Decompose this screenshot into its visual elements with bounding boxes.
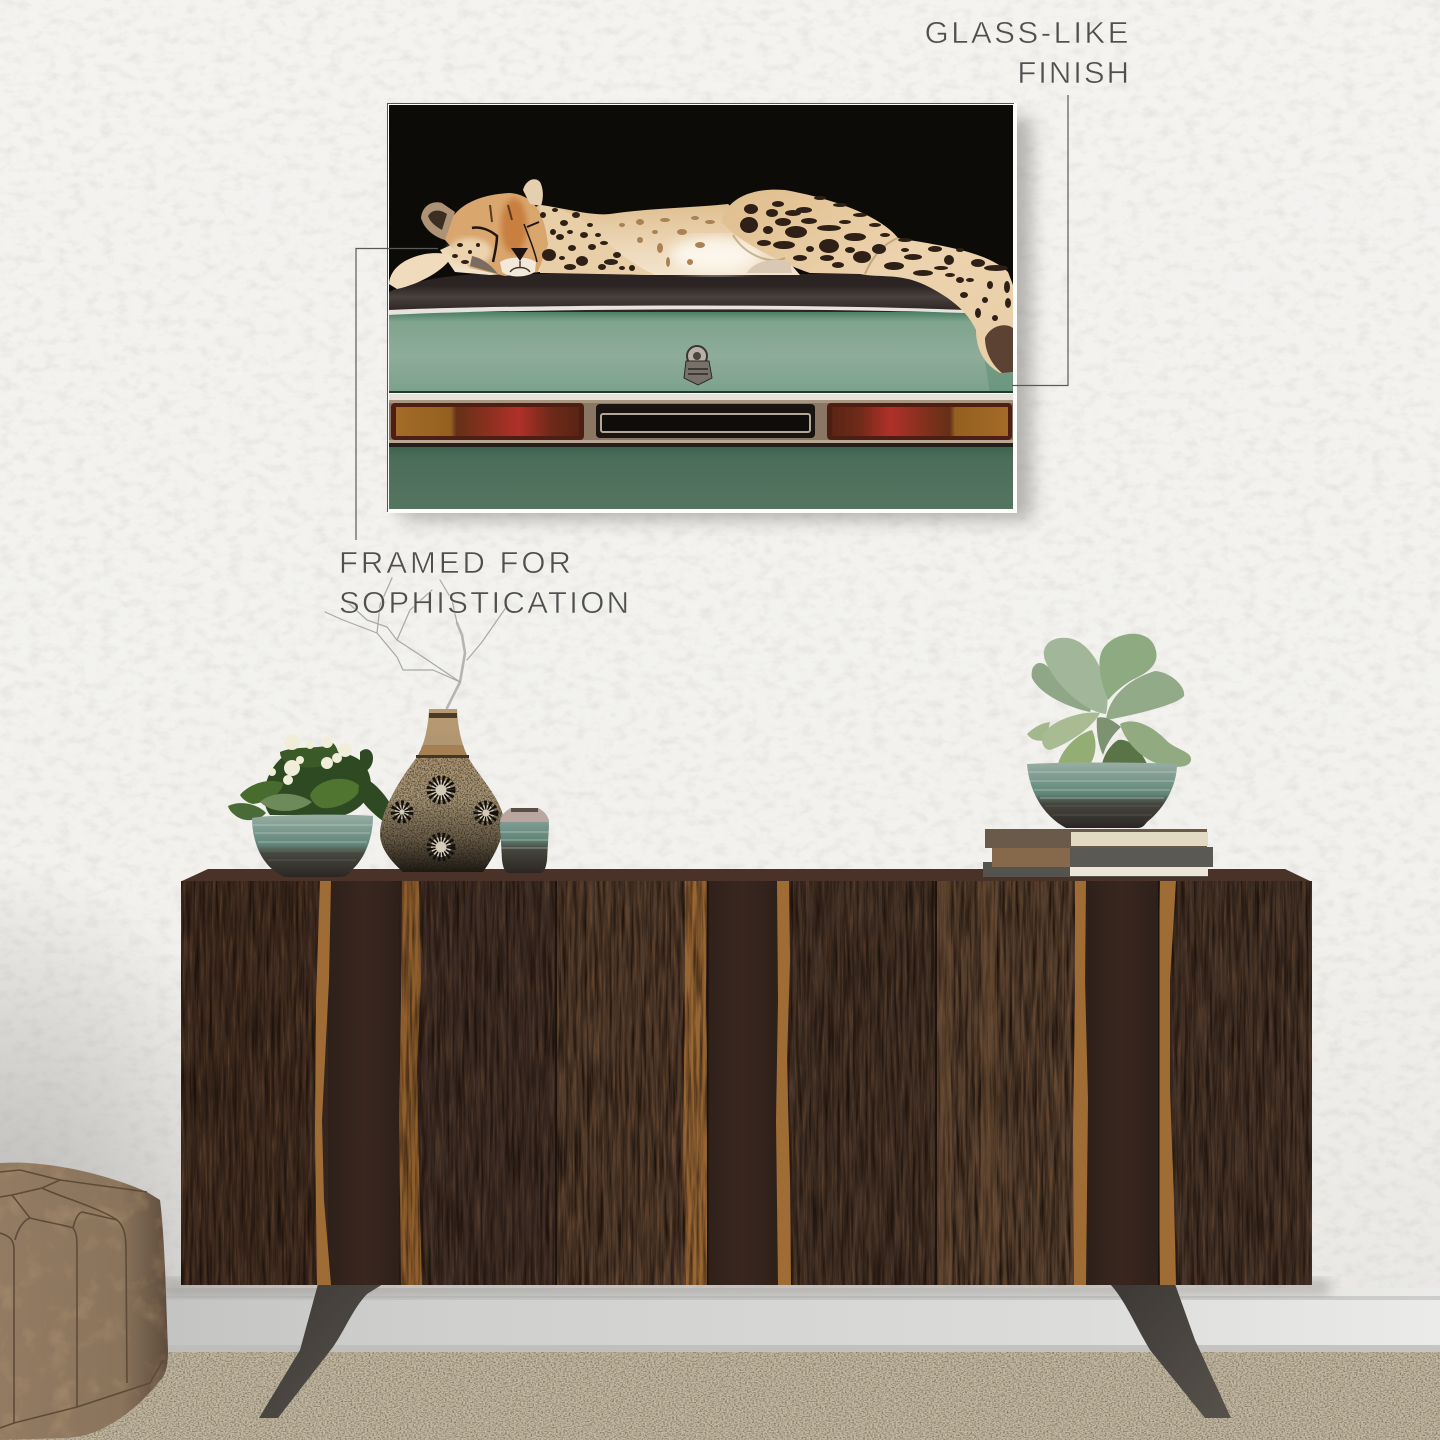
hanging paw pads — [985, 325, 1013, 373]
rug floor — [0, 1352, 1440, 1440]
left flowering plant in bowl — [228, 734, 403, 877]
cheetah body — [440, 204, 800, 275]
bare branches — [325, 578, 507, 708]
right succulent in bowl — [1027, 634, 1191, 828]
callout text: framed for sophistication: SOPHISTICATION — [339, 585, 631, 620]
right tail light — [827, 403, 1012, 440]
callout text: glass-like finish: FINISH — [1017, 55, 1131, 90]
front paw — [389, 253, 452, 289]
tail light panel — [389, 400, 1013, 445]
lower green panel — [389, 447, 1013, 509]
dark seat cushion — [389, 274, 985, 312]
sideboard top surface — [182, 869, 1310, 881]
car body — [389, 274, 1013, 509]
wood panel 2 — [416, 881, 555, 1285]
pouf seams — [0, 1170, 163, 1428]
plant leaves — [228, 743, 403, 833]
callout text: framed for sophistication: FRAMED FOR — [339, 545, 574, 580]
wood panel 5 — [937, 881, 1077, 1285]
vase rosettes — [395, 780, 494, 857]
centre plate recess — [596, 404, 815, 438]
right leg — [1110, 1284, 1231, 1418]
upper green panel — [389, 312, 1013, 393]
green bowl — [252, 815, 373, 877]
trunk badge — [684, 346, 712, 385]
tucked paw — [747, 260, 792, 273]
left tail light — [391, 403, 584, 440]
white frame — [387, 103, 1017, 513]
pouf body — [0, 1163, 168, 1440]
plain panel 2 — [706, 881, 778, 1285]
muzzle and nose — [470, 248, 536, 276]
sideboard legs — [259, 1284, 1231, 1418]
cabinet doors — [181, 881, 1312, 1285]
live edge strips — [315, 881, 1176, 1285]
top book — [985, 829, 1208, 848]
chrome strip — [389, 305, 965, 315]
sleeping cheetah — [389, 179, 1013, 373]
callout line: framed for sophistication — [356, 248, 438, 540]
plain panel 3 — [1086, 881, 1159, 1285]
haunch and hind leg — [722, 190, 1013, 373]
stacked books — [983, 829, 1213, 877]
shoulder — [540, 205, 655, 275]
panel seams — [555, 881, 1160, 1285]
bottom book — [983, 862, 1208, 877]
ears — [421, 179, 543, 240]
small striped jar — [500, 808, 549, 873]
baseboard — [0, 1278, 1440, 1352]
coat spots — [452, 196, 1011, 321]
ribbed bowl — [1027, 762, 1177, 828]
patterned vase — [378, 709, 508, 875]
rear leg shading — [733, 235, 898, 274]
pouf — [0, 1160, 170, 1440]
wood panel 6 — [1172, 881, 1312, 1285]
wood panel 4 — [788, 881, 935, 1285]
callout line: glass-like finish — [1012, 95, 1068, 386]
artwork black backdrop — [389, 105, 1013, 305]
succulent leaves — [1027, 634, 1191, 772]
sideboard — [181, 869, 1312, 1285]
white flowers — [268, 734, 352, 785]
wood panel 3 — [557, 881, 687, 1285]
pale body spots — [619, 216, 715, 267]
closed eyes and tear marks — [472, 205, 539, 262]
framed artwork — [387, 103, 1032, 520]
wood panel 1 — [181, 881, 321, 1285]
callout text: glass-like finish: GLASS-LIKE — [925, 15, 1131, 50]
plain panel 1 — [328, 881, 402, 1285]
head — [445, 193, 548, 276]
belly highlight — [670, 237, 760, 273]
middle book — [992, 847, 1213, 867]
frame drop shadow — [402, 118, 1032, 520]
left leg — [259, 1284, 383, 1418]
edge grain overlay — [399, 881, 709, 1285]
